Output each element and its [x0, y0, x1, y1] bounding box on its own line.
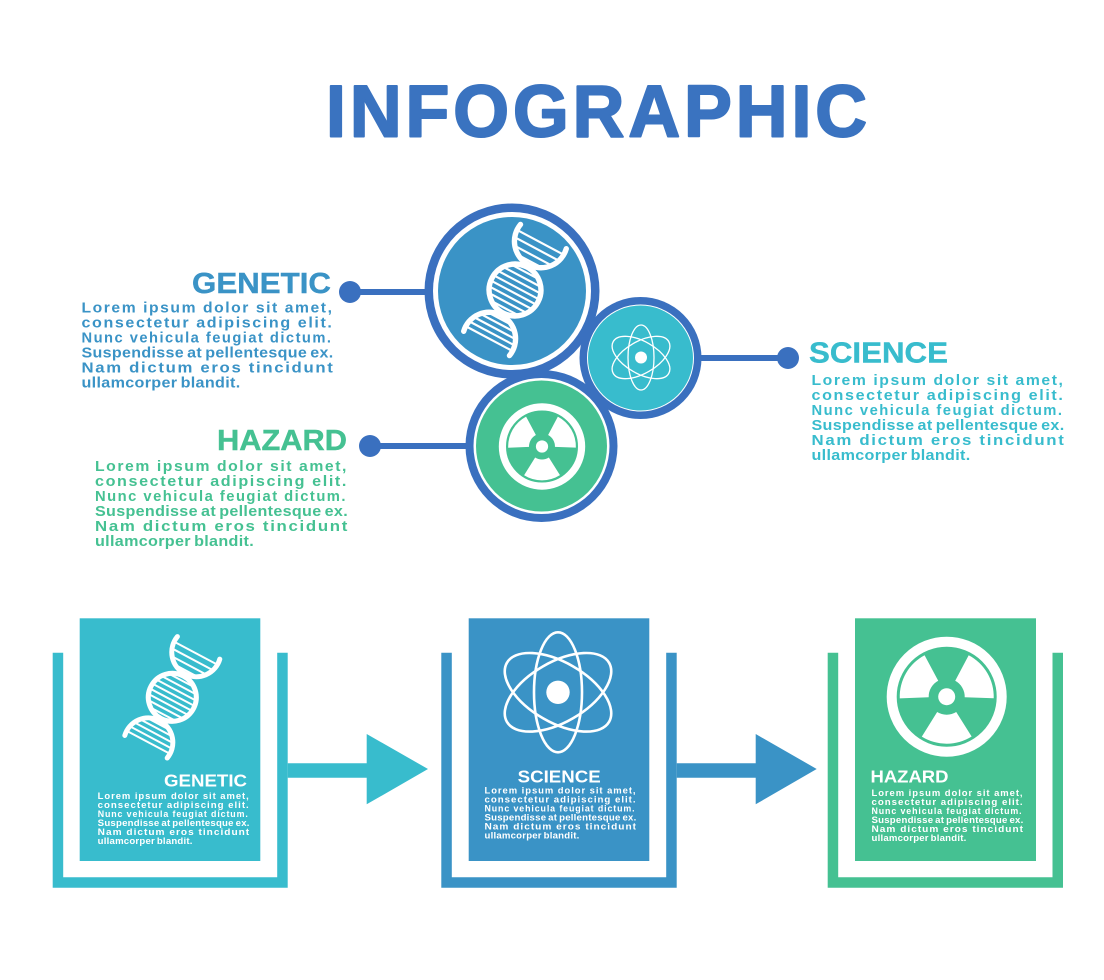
text block	[872, 788, 1024, 843]
heading: genetic: GENETIC	[192, 268, 331, 300]
tray	[53, 653, 288, 888]
text block	[484, 786, 637, 841]
label: genetic	[82, 268, 334, 392]
body text: genetic	[82, 300, 334, 392]
text block: ullamcorper blandit.	[872, 833, 966, 843]
text block: Lorem ipsum dolor sit amet,	[872, 788, 1024, 798]
text block: Suspendisse at pellentesque ex.	[872, 815, 1024, 825]
circle: hazard	[474, 378, 610, 514]
body text: science: Nam dictum eros tincidunt	[812, 432, 1066, 449]
body text: hazard: ullamcorper blandit.	[95, 533, 254, 550]
arrow 1	[288, 734, 428, 804]
body text: genetic: Suspendisse at pellentesque ex.	[82, 344, 334, 362]
body text: genetic: consectetur adipiscing elit.	[82, 314, 334, 332]
body text: hazard: Nam dictum eros tincidunt	[95, 518, 349, 535]
text block: Nunc vehicula feugiat dictum.	[98, 809, 249, 819]
text block: Nunc vehicula feugiat dictum.	[872, 806, 1022, 816]
panel: genetic	[53, 618, 288, 888]
connector: science	[698, 347, 799, 369]
card	[855, 618, 1036, 861]
arrow 2	[677, 734, 817, 804]
text block: ullamcorper blandit.	[98, 836, 193, 846]
text block: consectetur adipiscing elit.	[98, 800, 250, 810]
text block: Suspendisse at pellentesque ex.	[98, 818, 250, 828]
text block: Suspendisse at pellentesque ex.	[484, 813, 636, 823]
text block: Lorem ipsum dolor sit amet,	[98, 791, 250, 801]
text block: Nam dictum eros tincidunt	[484, 822, 637, 832]
body text: science	[812, 372, 1066, 464]
circle cluster	[424, 204, 702, 522]
connector: hazard	[359, 435, 470, 457]
heading: science: SCIENCE	[809, 338, 948, 370]
panel: hazard	[828, 618, 1063, 888]
tray	[828, 653, 1063, 888]
title: INFOGRAPHIC	[326, 72, 871, 152]
panel: science	[441, 618, 677, 888]
body text: science: ullamcorper blandit.	[812, 447, 970, 464]
label: science	[809, 338, 1066, 464]
connector: genetic	[339, 281, 430, 303]
icon: radiation	[887, 642, 1002, 758]
heading: hazard: HAZARD	[217, 425, 347, 457]
text block: Lorem ipsum dolor sit amet,	[484, 786, 636, 796]
text block: Nam dictum eros tincidunt	[98, 827, 250, 837]
icon: atom	[492, 632, 624, 752]
card	[80, 618, 260, 861]
circle: genetic	[433, 212, 591, 370]
body text: hazard: Nunc vehicula feugiat dictum.	[95, 488, 347, 505]
body text: genetic: Lorem ipsum dolor sit amet,	[82, 300, 334, 316]
heading: SCIENCE	[518, 766, 601, 786]
body text: hazard: Suspendisse at pellentesque ex.	[95, 503, 348, 520]
body text: hazard	[95, 458, 349, 550]
heading: HAZARD	[870, 766, 948, 786]
body text: science: consectetur adipiscing elit.	[812, 387, 1064, 404]
tray	[441, 653, 677, 888]
text block: ullamcorper blandit.	[484, 831, 580, 841]
body text: science: Suspendisse at pellentesque ex.	[812, 417, 1064, 434]
body text: genetic: ullamcorper blandit.	[82, 374, 240, 392]
body text: hazard: Lorem ipsum dolor sit amet,	[95, 458, 348, 475]
text block: Nunc vehicula feugiat dictum.	[484, 804, 636, 814]
card	[469, 618, 649, 861]
body text: genetic: Nunc vehicula feugiat dictum.	[82, 330, 332, 346]
body text: science: Lorem ipsum dolor sit amet,	[812, 372, 1064, 389]
text block	[98, 791, 250, 846]
body text: science: Nunc vehicula feugiat dictum.	[812, 402, 1064, 419]
circle: science	[587, 304, 694, 412]
label: hazard	[95, 425, 349, 550]
body text: hazard: consectetur adipiscing elit.	[95, 473, 348, 490]
text block: consectetur adipiscing elit.	[484, 795, 636, 805]
body text: genetic: Nam dictum eros tincidunt	[82, 360, 334, 376]
heading: GENETIC	[164, 770, 247, 790]
text block: consectetur adipiscing elit.	[872, 797, 1024, 807]
icon: dna	[124, 636, 220, 758]
text block: Nam dictum eros tincidunt	[872, 824, 1024, 834]
